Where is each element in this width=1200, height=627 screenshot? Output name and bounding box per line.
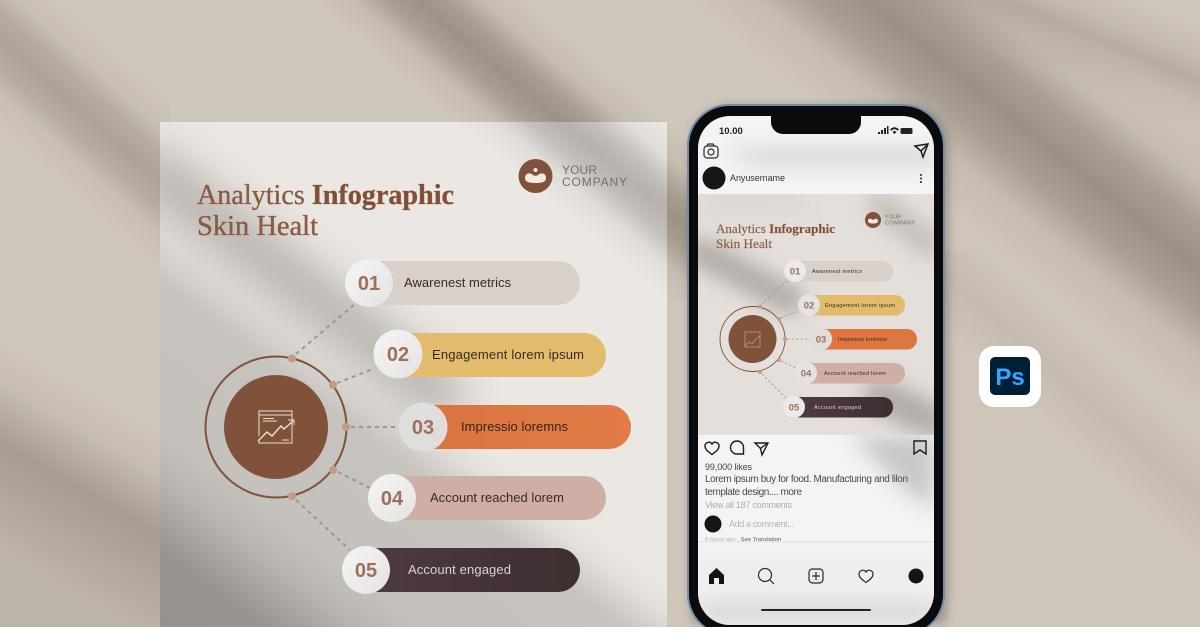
post image: mini infographic xyxy=(698,194,934,435)
mini item 02: 02 xyxy=(804,300,814,312)
icon: photoshop badge xyxy=(979,346,1041,407)
caption: 6 hours ago · See Translation xyxy=(705,537,781,543)
mini item 04: 04 xyxy=(801,368,812,380)
icon: send xyxy=(915,144,928,157)
item 02 xyxy=(374,330,606,378)
item 01: Awarenest metrics xyxy=(404,275,512,290)
logo: your company: COMPANY xyxy=(562,175,627,189)
caption: 99,000 likes xyxy=(705,462,752,472)
mini title: Skin Healt xyxy=(716,236,772,251)
phone mockup xyxy=(687,104,948,627)
item 04: Account reached lorem xyxy=(430,490,564,505)
bottom navigation xyxy=(709,568,924,611)
title xyxy=(197,180,454,242)
panel: infographic poster xyxy=(150,122,667,627)
item 04 xyxy=(368,474,606,522)
action icons xyxy=(705,441,926,455)
mini item 02 xyxy=(798,294,905,316)
item 01: 01 xyxy=(358,273,380,295)
item 03: Impressio loremns xyxy=(461,419,568,434)
caption: template design.... more xyxy=(705,487,802,498)
mini item 01: 01 xyxy=(790,266,801,278)
item 03: 03 xyxy=(412,417,434,439)
status bar xyxy=(720,116,912,134)
item 02: Engagement lorem ipsum xyxy=(432,347,584,362)
mini item 04: Account reached lorem xyxy=(824,371,886,377)
mini item 05 xyxy=(783,396,893,418)
status bar: 10.00 xyxy=(719,126,743,137)
logo: your company xyxy=(518,159,627,193)
title: Analytics Infographic xyxy=(197,180,454,211)
mini item 03: Impressio loremns xyxy=(838,337,887,343)
mini item 02: Engagement lorem ipsum xyxy=(825,303,895,309)
icon: camera xyxy=(704,144,718,158)
phone screen xyxy=(698,116,934,625)
central hub with chart icon xyxy=(206,354,350,500)
mini logo: YOUR xyxy=(885,214,901,220)
mini item 03 xyxy=(816,329,917,350)
mini item 05: Account engaged xyxy=(814,405,861,411)
mini title: Analytics Infographic xyxy=(716,221,835,236)
mini title xyxy=(716,224,835,248)
mini item 01 xyxy=(784,260,893,282)
title: Skin Healt xyxy=(197,211,318,242)
item 01 xyxy=(345,259,580,307)
mini item 05: 05 xyxy=(789,402,800,414)
mini connectors xyxy=(762,280,810,399)
caption: View all 187 comments xyxy=(705,500,792,510)
item 05: 05 xyxy=(355,560,377,582)
mini item 01: Awarenest metrics xyxy=(812,269,862,275)
connector lines xyxy=(296,304,398,550)
icon: analytics chart window xyxy=(258,411,294,443)
mini item 04 xyxy=(801,363,905,384)
logo: your company: YOUR xyxy=(562,163,597,177)
profile row xyxy=(702,166,922,190)
caption xyxy=(704,462,908,543)
item 05: Account engaged xyxy=(408,562,511,577)
item 03 xyxy=(398,402,631,452)
mini item 03: 03 xyxy=(816,334,826,346)
caption: Add a comment... xyxy=(729,519,794,529)
mini logo: COMPANY xyxy=(885,220,915,226)
profile row: Anyusername xyxy=(730,173,785,183)
icon: photoshop badge: Ps xyxy=(995,364,1025,391)
caption: Lorem ipsum buy for food. Manufacturing and lilon xyxy=(705,474,908,485)
panel shadows xyxy=(150,122,667,627)
mini logo xyxy=(865,212,915,228)
mini hub xyxy=(720,304,787,374)
item 05 xyxy=(342,546,580,594)
item 02: 02 xyxy=(387,344,409,366)
item 04: 04 xyxy=(381,488,404,510)
